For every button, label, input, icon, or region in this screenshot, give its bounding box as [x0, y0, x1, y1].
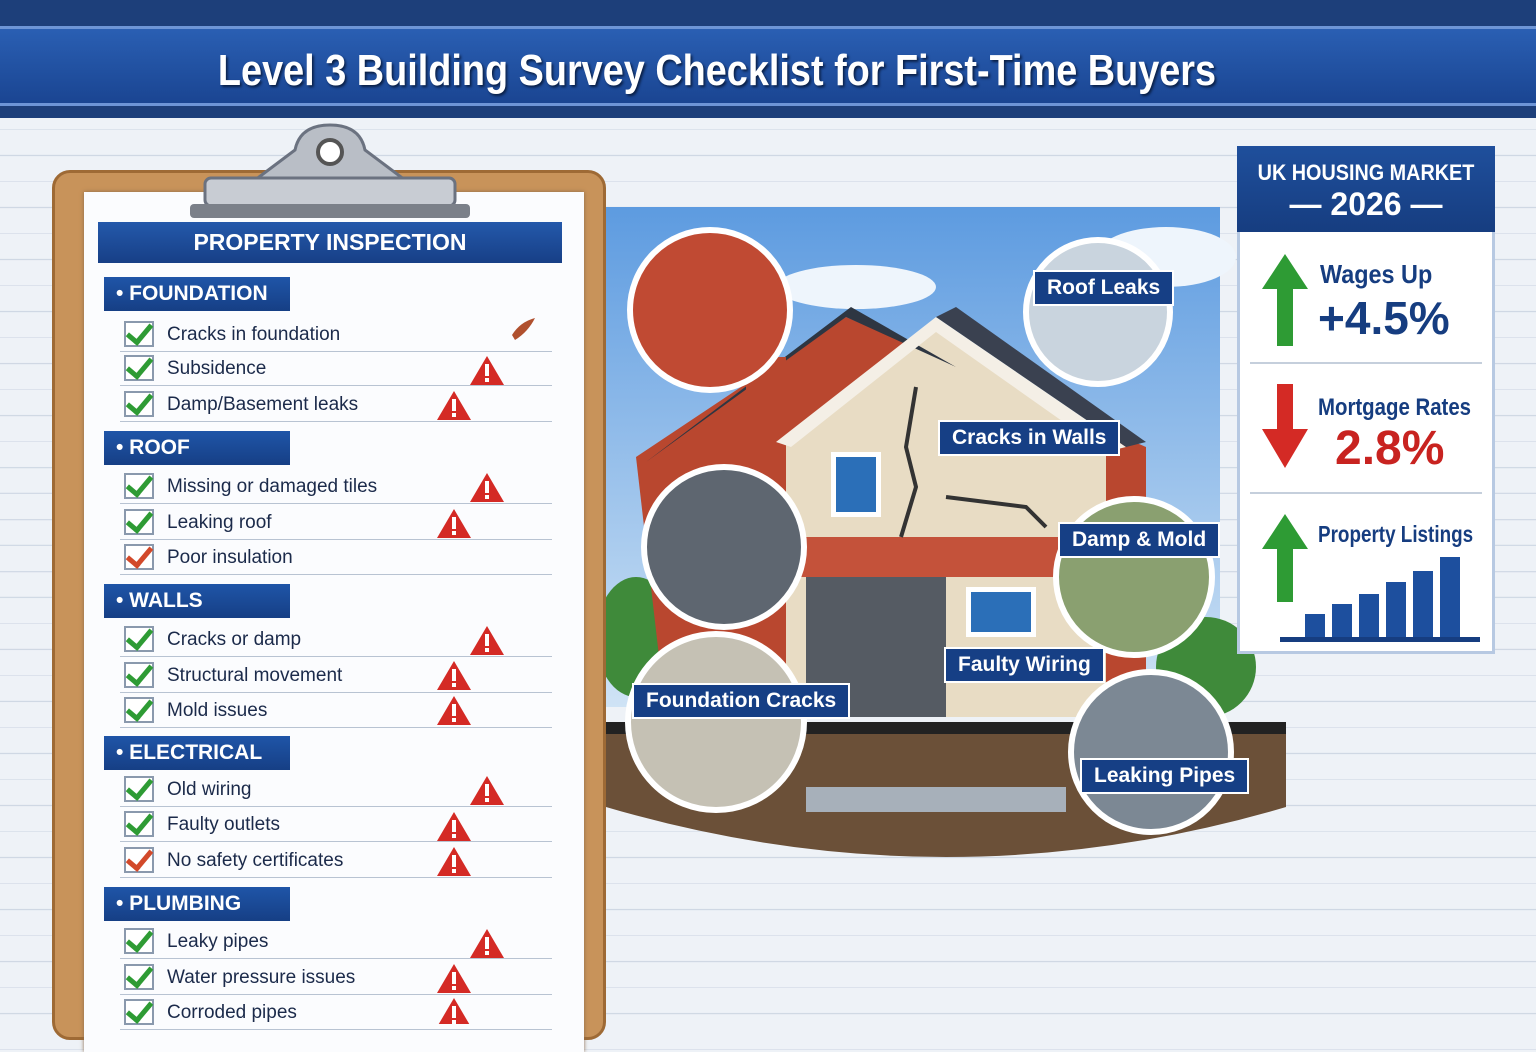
- checklist: Water pressure issues: [167, 967, 355, 988]
- checklist: Mold issues: [167, 700, 267, 721]
- checklist: • WALLS: [116, 589, 203, 612]
- title banner: [0, 0, 1536, 118]
- text: Leaking Pipes: [1094, 764, 1235, 787]
- title: Level 3 Building Survey Checklist for First-Time Buyers: [218, 46, 1216, 95]
- stat: listings chart: [1262, 514, 1480, 642]
- house illustration: [606, 207, 1286, 857]
- checklist: • FOUNDATION: [116, 282, 268, 305]
- text: Foundation Cracks: [646, 689, 836, 712]
- checklist: Structural movement: [167, 665, 342, 686]
- checklist: Damp/Basement leaks: [167, 394, 358, 415]
- header: — 2026 —: [1290, 186, 1442, 222]
- stat: wages: [1250, 249, 1482, 364]
- stat: mortgage: [1250, 379, 1482, 494]
- checklist: Faulty outlets: [167, 814, 280, 835]
- checklist: No safety certificates: [167, 850, 343, 871]
- labels on house: [1033, 270, 1174, 306]
- checklist: • ROOF: [116, 436, 190, 459]
- warning icons: [437, 318, 535, 1024]
- panel header: property inspection: PROPERTY INSPECTION: [193, 229, 467, 255]
- stat: wages: Wages Up: [1320, 259, 1432, 289]
- stat: mortgage: Mortgage Rates: [1318, 394, 1471, 421]
- checklist: • PLUMBING: [116, 892, 241, 915]
- panel header: property inspection: [98, 222, 562, 263]
- checklist: Subsidence: [167, 358, 266, 379]
- checklist: Leaky pipes: [167, 931, 268, 952]
- checklist: [104, 277, 552, 1030]
- checklist: Leaking roof: [167, 512, 272, 533]
- text: Faulty Wiring: [958, 653, 1091, 676]
- checklist: Cracks or damp: [167, 629, 301, 650]
- stat: mortgage: 2.8%: [1335, 422, 1444, 475]
- panel: UK housing market: [1237, 146, 1495, 654]
- labels on house: Roof Leaks: [1047, 276, 1160, 299]
- stat: listings chart: Property Listings: [1318, 521, 1473, 547]
- stat: wages: +4.5%: [1318, 292, 1450, 344]
- clipboard: [52, 170, 606, 1040]
- header: UK HOUSING MARKET: [1258, 160, 1474, 185]
- text: Damp & Mold: [1072, 528, 1206, 551]
- checklist: Missing or damaged tiles: [167, 476, 377, 497]
- checklist: Cracks in foundation: [167, 324, 340, 345]
- checklist: Poor insulation: [167, 547, 293, 568]
- icon: clip: [190, 124, 470, 218]
- checklist: • ELECTRICAL: [116, 741, 262, 764]
- header: [1237, 146, 1495, 232]
- checklist: Old wiring: [167, 779, 251, 800]
- checklist: Corroded pipes: [167, 1002, 297, 1023]
- text: Cracks in Walls: [952, 426, 1106, 449]
